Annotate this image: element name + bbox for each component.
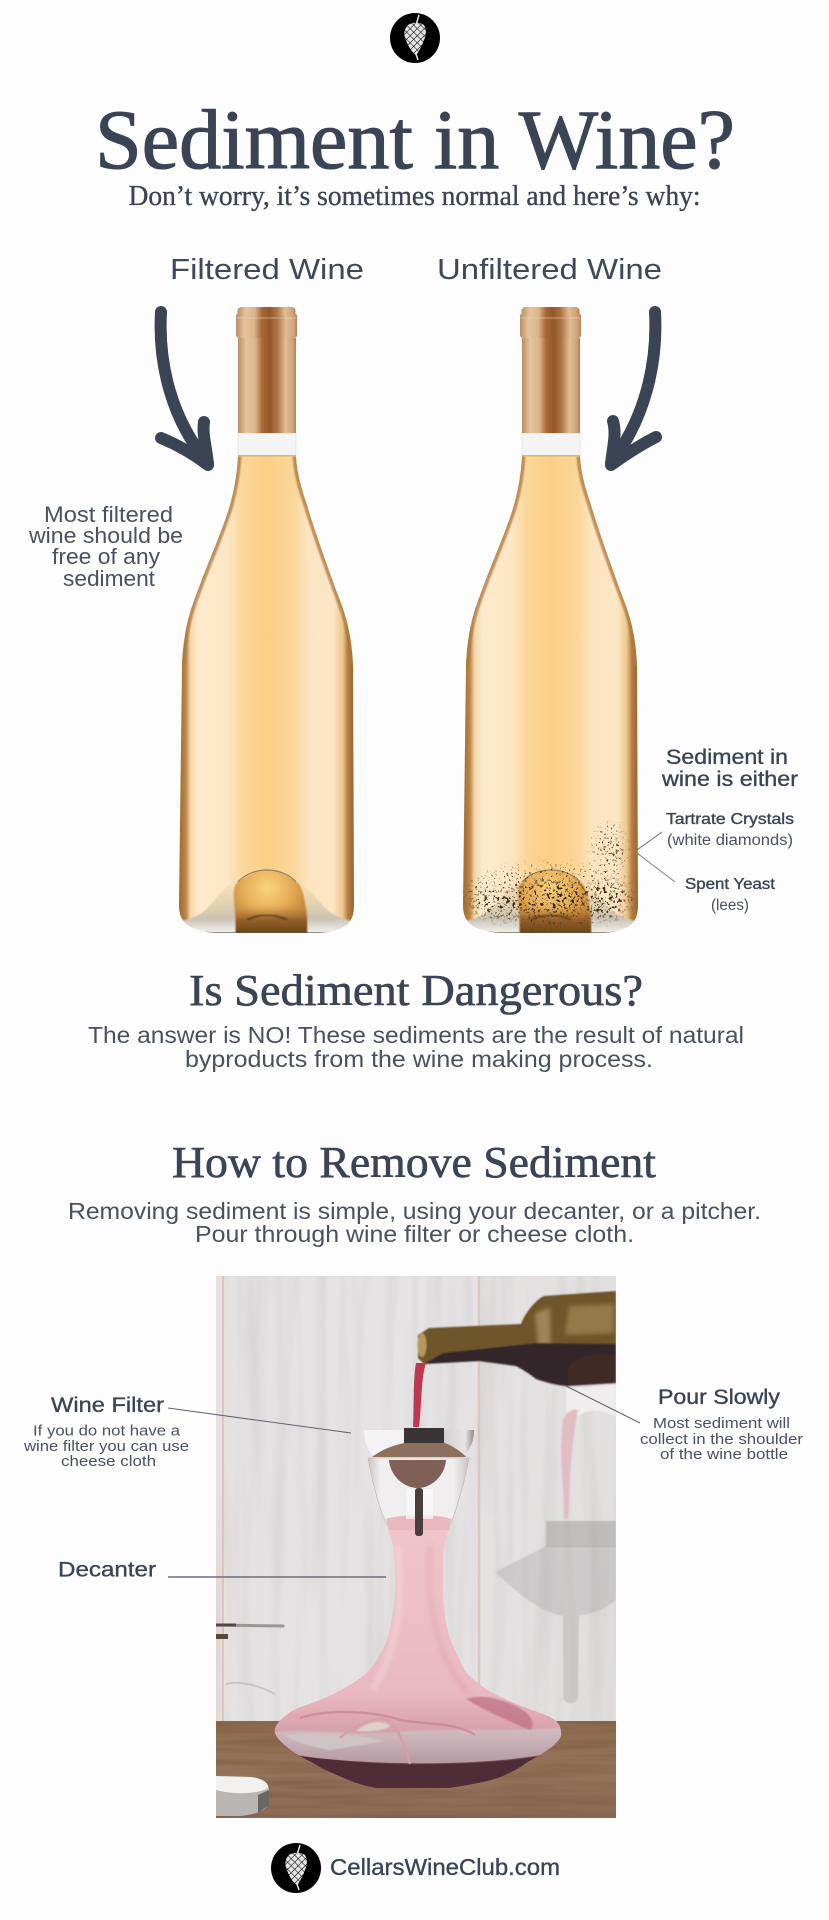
label: pour slowly: Pour Slowly [658,1386,781,1409]
text: answer: The answer is NO! These sediments are the result of natural [88,1022,744,1048]
wall shadow of decanter [495,1521,616,1703]
arrow: to unfiltered bottle [611,312,656,465]
text: sediment types: wine is either [661,768,798,791]
photo: wine pouring through filter into decanter [216,1276,616,1818]
heading: how to remove sediment: How to Remove Sediment [172,1138,656,1187]
text: filtered wine note [28,502,183,591]
metal cap [216,1776,269,1816]
label: pour slowly: Most sediment will [653,1415,790,1432]
text: sediment types: (white diamonds) [667,832,793,849]
label: pour slowly [566,1386,803,1463]
bottle: filtered wine [170,307,364,940]
text: sediment types: Tartrate Crystals [666,811,794,828]
heading: unfiltered wine: Unfiltered Wine [437,254,662,286]
arrow: to filtered bottle [161,312,208,465]
wine stream [413,1363,426,1427]
text: sediment types: Sediment in [666,746,788,769]
label: wine filter: cheese cloth [61,1453,156,1470]
text: filtered wine note: Most filtered [44,502,173,527]
filter bowl [364,1428,474,1457]
footer website: CellarsWineClub.com [330,1854,560,1880]
text: sediment types: Spent Yeast [685,876,776,893]
text: removal instructions: Pour through wine filter or cheese cloth. [195,1221,634,1247]
label: wine filter: wine filter you can use [23,1438,189,1455]
subtitle: Don’t worry, it’s sometimes normal and here’s why: [128,180,700,212]
metal rail [216,1625,283,1626]
text: answer: byproducts from the wine making process. [185,1046,653,1072]
heading: filtered wine: Filtered Wine [170,254,364,286]
label: decanter: Decanter [58,1558,156,1582]
footer logo [271,1843,321,1893]
pouring bottle [418,1291,616,1386]
text: filtered wine note: wine should be [28,523,183,548]
text: sediment types [637,746,798,914]
text: sediment types: (lees) [711,897,749,914]
text: filtered wine note: sediment [63,566,155,591]
label: wine filter: Wine Filter [51,1394,164,1417]
label: pour slowly: of the wine bottle [660,1446,788,1463]
text: answer [88,1022,744,1072]
filter stem [415,1488,423,1536]
text: removal instructions [68,1198,761,1247]
text: filtered wine note: free of any [52,544,160,569]
title: Sediment in Wine? [95,93,735,187]
wall reflection under bottle [566,1385,616,1416]
decanter body [275,1523,561,1788]
label: wine filter: If you do not have a [33,1422,181,1440]
filter cone [368,1458,469,1530]
label: wine filter [23,1394,351,1470]
text: removal instructions: Removing sediment is simple, using your decanter, or a pitcher. [68,1198,761,1224]
heading: is sediment dangerous: Is Sediment Dangerous? [189,966,643,1015]
bottle: unfiltered wine with sediment [454,307,648,940]
logo: pine cone badge top [390,13,440,63]
wine drip reflection [561,1409,578,1519]
label: pour slowly: collect in the shoulder [640,1431,803,1448]
